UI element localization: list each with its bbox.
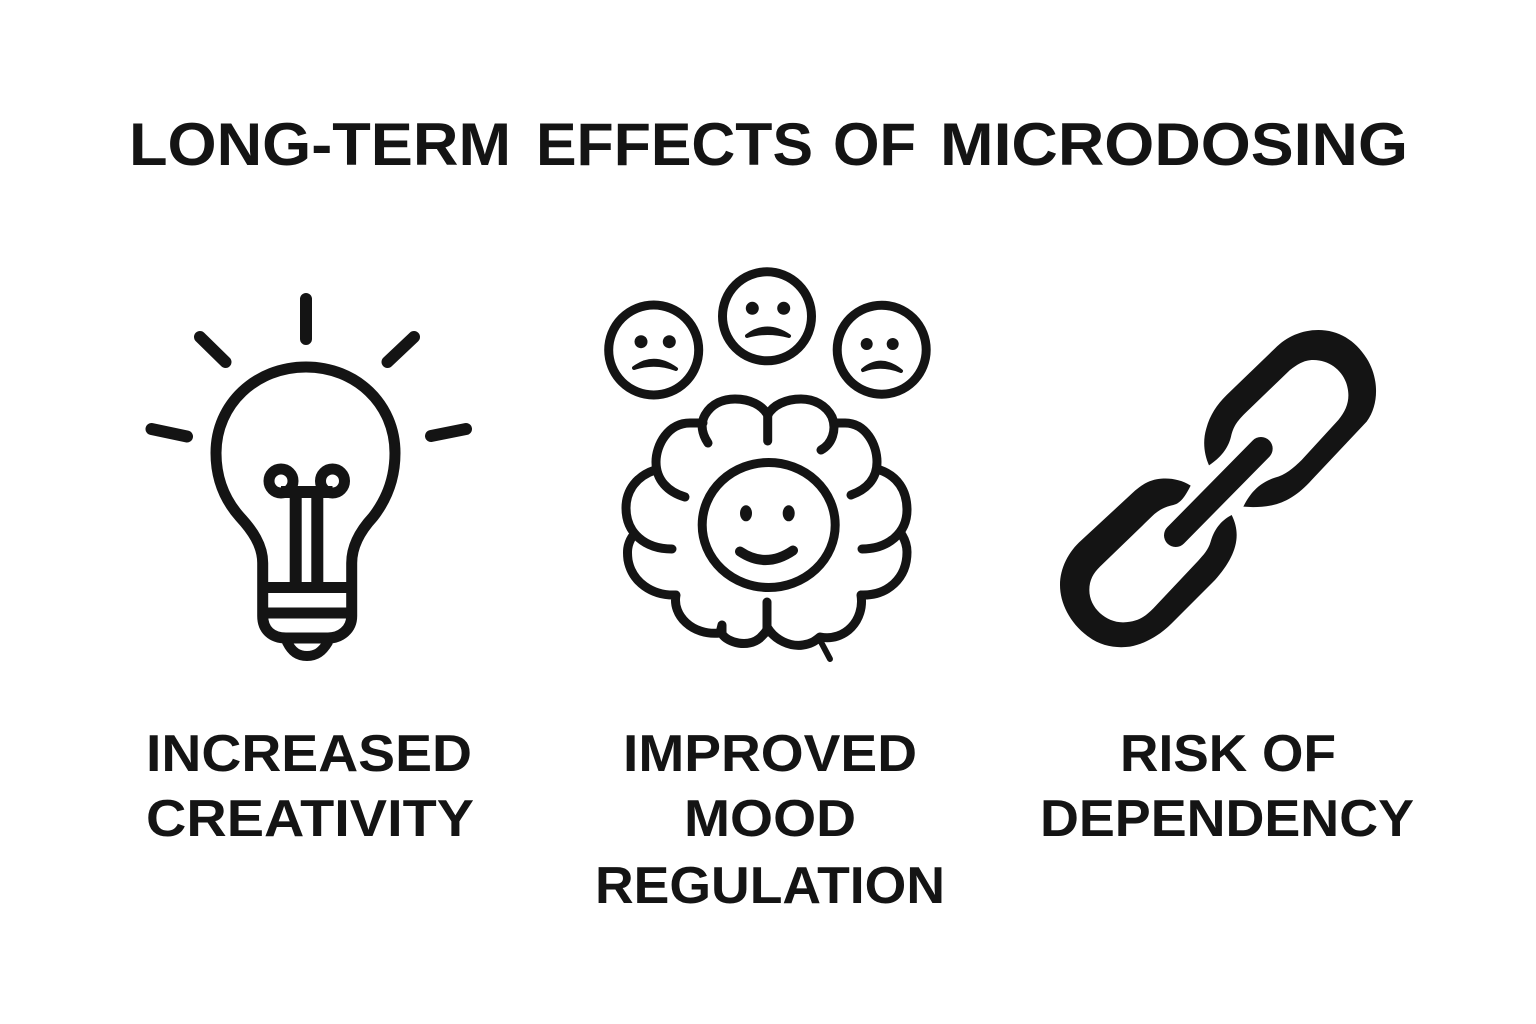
title: MICRODOSING <box>940 111 1408 178</box>
label: improved mood regulation: MOOD <box>684 790 856 848</box>
icon: sad face left <box>609 305 699 395</box>
icon: light bulb <box>152 299 466 656</box>
icon: bulb tip <box>287 642 328 656</box>
icon: sad face right <box>837 305 926 394</box>
icon: filament <box>269 469 344 587</box>
title: EFFECTS <box>536 111 813 178</box>
label: improved mood regulation <box>595 725 945 915</box>
label: improved mood regulation: IMPROVED <box>623 725 917 783</box>
icon: centre link bar <box>1176 449 1261 535</box>
title: OF <box>833 111 916 178</box>
label: increased creativity: INCREASED <box>146 725 472 783</box>
icon: sad face centre <box>722 272 812 361</box>
icon: lower link <box>1060 479 1237 647</box>
icon: smiling face <box>702 462 835 588</box>
label: improved mood regulation: REGULATION <box>595 857 945 915</box>
label: increased creativity <box>146 725 474 848</box>
icon: socket bands <box>262 588 352 613</box>
icon: chain link <box>1060 330 1376 647</box>
icon: bulb glass and socket <box>216 367 395 638</box>
title <box>129 111 1408 178</box>
icon: upper link <box>1204 330 1376 507</box>
icon: brain with faces <box>609 272 926 659</box>
icon: light rays <box>152 299 466 436</box>
label: increased creativity: CREATIVITY <box>146 790 474 848</box>
label: risk of dependency <box>1040 725 1414 848</box>
label: risk of dependency: RISK OF <box>1120 725 1336 783</box>
title: LONG-TERM <box>129 111 511 178</box>
label: risk of dependency: DEPENDENCY <box>1040 790 1414 848</box>
icon: brain outline <box>626 399 907 659</box>
